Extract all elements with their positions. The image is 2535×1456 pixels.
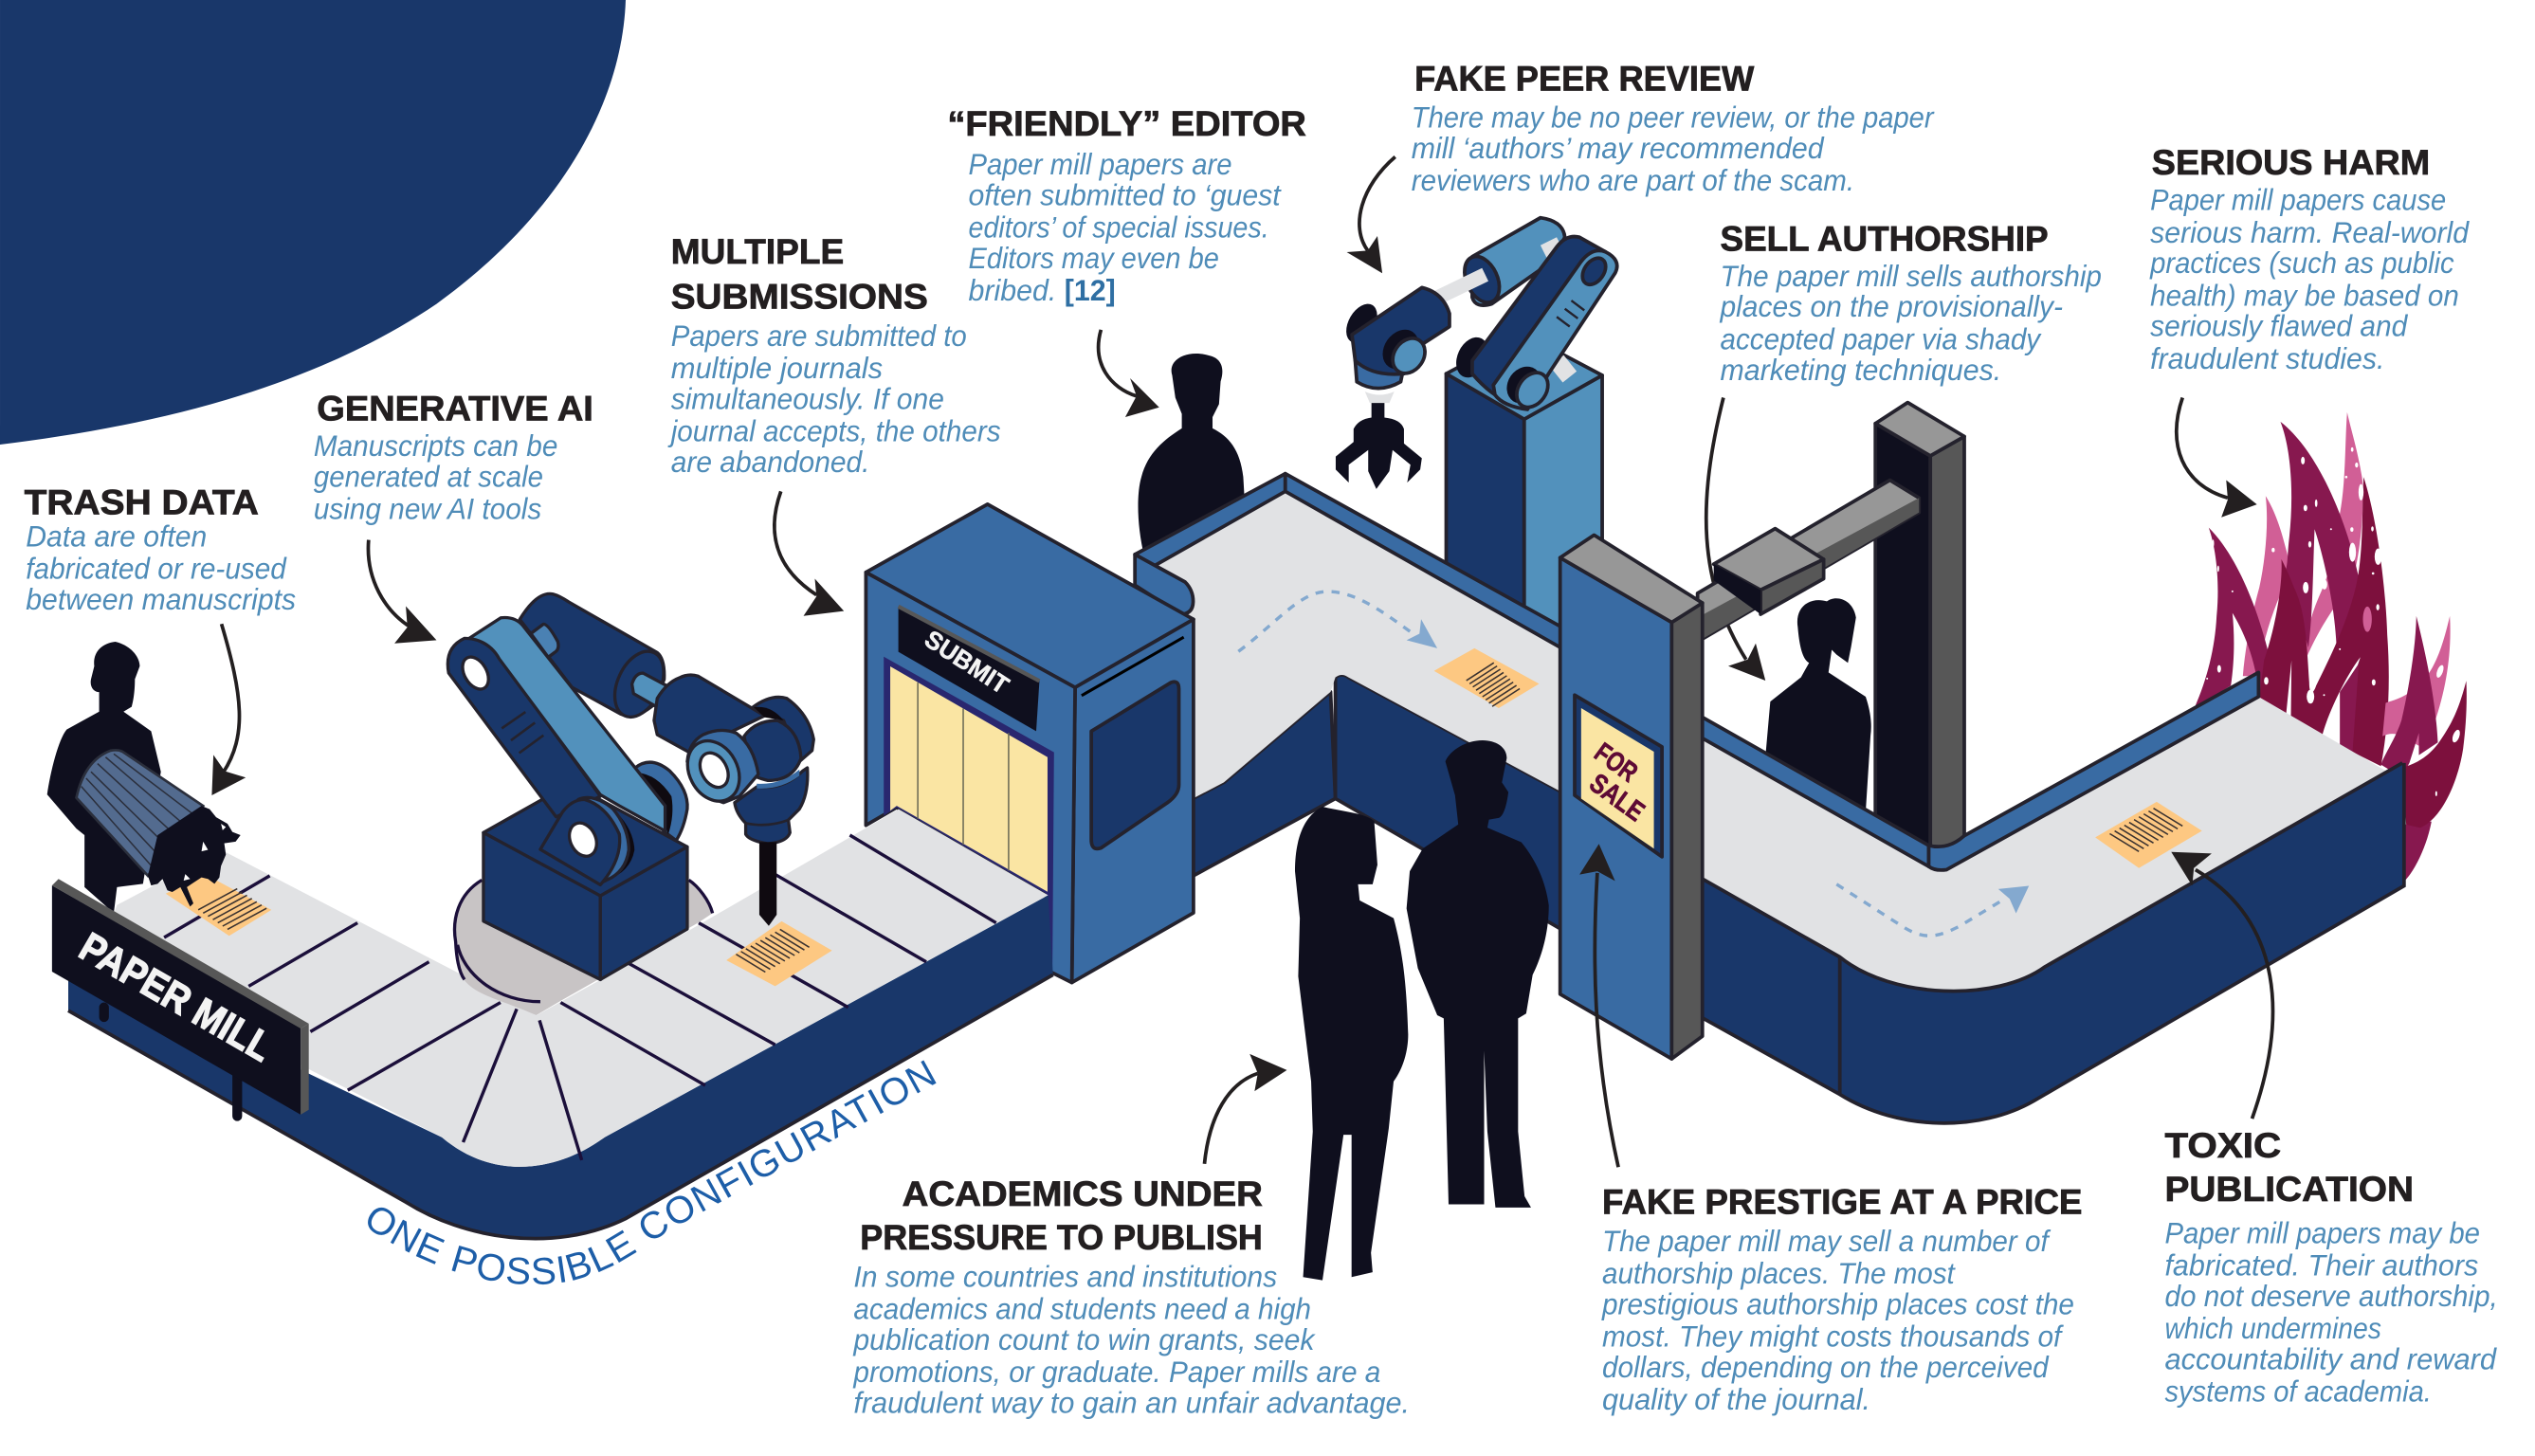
base box bbox=[483, 784, 687, 896]
for sale placard bbox=[1575, 695, 1662, 857]
illustration: fake peer review robot arm on column bbox=[1336, 218, 1617, 650]
machine: gantry beam bbox=[1698, 480, 1919, 642]
text block: serious harm: practices (such as public bbox=[2149, 246, 2454, 280]
text block: trash data bbox=[25, 482, 296, 616]
text block: fake peer review: There may be no peer review, or the paper bbox=[1412, 101, 1935, 135]
text block: fake prestige at a price: quality of the journal. bbox=[1602, 1383, 1870, 1416]
back walls bbox=[1135, 474, 1286, 566]
text block: generative AI: GENERATIVE AI bbox=[317, 389, 593, 428]
text block: academics under pressure: academics and students need a high bbox=[853, 1293, 1311, 1326]
text block: sell authorship: places on the provisionally- bbox=[1720, 290, 2063, 323]
wrist body bbox=[654, 675, 765, 752]
text block: academics under pressure: PRESSURE TO PUBLISH bbox=[860, 1218, 1263, 1257]
dashed direction arrow bbox=[1238, 592, 1413, 651]
text block: sell authorship: marketing techniques. bbox=[1720, 354, 2001, 387]
machine: for sale pillar bbox=[1560, 535, 1703, 1059]
text block: generative AI: generated at scale bbox=[314, 460, 543, 493]
silhouette bbox=[47, 642, 161, 913]
text block: multiple submissions: Papers are submitted to bbox=[671, 319, 967, 353]
sign board bbox=[52, 885, 301, 1115]
text block: sell authorship: accepted paper via shady bbox=[1720, 322, 2043, 355]
text block: generative AI bbox=[314, 389, 593, 525]
text block: toxic publication: Paper mill papers may be bbox=[2164, 1216, 2480, 1249]
text block: trash data: Data are often bbox=[26, 519, 207, 553]
text block: toxic publication: which undermines bbox=[2164, 1312, 2381, 1345]
window bbox=[1091, 682, 1179, 848]
text block: academics under pressure: fraudulent way to gain an unfair advantage. bbox=[853, 1386, 1410, 1419]
posts bbox=[104, 1008, 237, 1117]
dashed direction arrow bbox=[1836, 884, 2005, 936]
text block: trash data: between manuscripts bbox=[26, 583, 296, 616]
wrist bbox=[1340, 299, 1383, 348]
text block: friendly editor bbox=[947, 104, 1306, 307]
top face bbox=[866, 504, 1194, 687]
text block: trash data: TRASH DATA bbox=[25, 482, 259, 521]
arrow: trash data bbox=[211, 624, 246, 795]
belt slats bbox=[164, 835, 996, 1160]
text block: serious harm: fraudulent studies. bbox=[2150, 342, 2384, 375]
placard label: SALE bbox=[1584, 768, 1650, 828]
text block: academics under pressure: promotions, or graduate. Paper mills are a bbox=[852, 1356, 1380, 1389]
text block: serious harm: seriously flawed and bbox=[2150, 310, 2409, 343]
text block: friendly editor: often submitted to ‘guest bbox=[969, 179, 1282, 212]
figure: man academic silhouette bbox=[1407, 740, 1549, 1208]
sign label: PAPER MILL bbox=[72, 924, 281, 1071]
text block: sell authorship bbox=[1720, 219, 2102, 387]
front face bbox=[866, 573, 1075, 983]
submit sign bbox=[899, 607, 1039, 731]
text block: serious harm: Paper mill papers cause bbox=[2150, 184, 2446, 217]
turntable disc bbox=[455, 880, 713, 1015]
text block: sell authorship: The paper mill sells authorship bbox=[1720, 260, 2102, 293]
text block: academics under pressure: In some countries and institutions bbox=[853, 1260, 1277, 1293]
arrow: multiple submissions bbox=[775, 491, 844, 616]
text block: multiple submissions: SUBMISSIONS bbox=[671, 278, 928, 317]
text block: toxic publication: fabricated. Their authors bbox=[2164, 1249, 2478, 1283]
paper bbox=[2095, 802, 2202, 868]
text block: multiple submissions: journal accepts, the others bbox=[667, 415, 1001, 448]
belt surface bbox=[1155, 491, 1561, 802]
trash spilling out bbox=[148, 806, 241, 906]
column bbox=[1447, 373, 1524, 614]
text block: toxic publication: do not deserve authorship, bbox=[2164, 1280, 2498, 1313]
gripper claw bbox=[1336, 403, 1422, 489]
arrow: sell authorship bbox=[1706, 398, 1765, 681]
text block: fake prestige at a price: most. They might costs thousands of bbox=[1602, 1320, 2065, 1354]
text block: fake prestige at a price: FAKE PRESTIGE AT A PRICE bbox=[1602, 1183, 2082, 1222]
text block: toxic publication: accountability and reward bbox=[2164, 1342, 2498, 1375]
rear link bbox=[520, 593, 665, 716]
machine: submit booth bbox=[866, 504, 1194, 983]
arrow: generative AI bbox=[368, 540, 436, 644]
text block: friendly editor: Paper mill papers are bbox=[969, 148, 1231, 181]
figure: woman academic silhouette bbox=[1295, 807, 1408, 1281]
text block: generative AI: using new AI tools bbox=[314, 492, 541, 525]
text block: fake prestige at a price: prestigious authorship places cost the bbox=[1601, 1287, 2074, 1320]
illustration: toxic flames bbox=[2195, 412, 2467, 882]
right face bbox=[1072, 619, 1194, 983]
navy sides bbox=[1187, 692, 1336, 880]
text block: fake peer review: mill ‘authors’ may recommended bbox=[1412, 132, 1825, 165]
arrow: toxic publication bbox=[2171, 852, 2272, 1119]
arm link bbox=[447, 638, 600, 817]
door frame bbox=[884, 657, 1054, 973]
text block: multiple submissions bbox=[667, 232, 1001, 479]
arm link bbox=[1450, 332, 1494, 383]
illustration: generative AI robot arm bbox=[447, 593, 813, 1015]
arrow: fake peer review bbox=[1347, 156, 1395, 273]
machine: rear column bbox=[1875, 403, 1964, 857]
round joint bbox=[744, 720, 801, 780]
front pivot bbox=[607, 809, 634, 880]
text block: friendly editor: editors’ of special issues. bbox=[969, 211, 1269, 245]
text block: serious harm: health) may be based on bbox=[2150, 279, 2459, 312]
text block: fake peer review bbox=[1412, 59, 1935, 197]
decorative navy corner shape bbox=[0, 0, 626, 445]
upper cylinder bbox=[1472, 218, 1565, 305]
conveyor section: upper belt with walls bbox=[1135, 474, 1561, 930]
rolled wall end bbox=[1135, 555, 1194, 614]
text block: multiple submissions: simultaneously. If one bbox=[671, 382, 944, 415]
back cap bbox=[752, 697, 813, 761]
walls bbox=[1698, 715, 1928, 866]
sign label: SUBMIT bbox=[920, 625, 1014, 700]
arrow: fake prestige bbox=[1579, 844, 1618, 1167]
text block: multiple submissions: MULTIPLE bbox=[671, 232, 844, 271]
text block: sell authorship: SELL AUTHORSHIP bbox=[1720, 219, 2049, 258]
text block: toxic publication bbox=[2164, 1126, 2498, 1409]
text block: friendly editor: bribed. [12] bbox=[969, 274, 1116, 307]
text block: serious harm: SERIOUS HARM bbox=[2152, 143, 2430, 182]
text block: toxic publication: systems of academia. bbox=[2164, 1375, 2432, 1409]
text block: academics under pressure: ACADEMICS UNDER bbox=[903, 1174, 1263, 1213]
text block: toxic publication: PUBLICATION bbox=[2164, 1170, 2414, 1209]
conveyor section: final belt bbox=[1698, 672, 2404, 1123]
text block: fake prestige at a price bbox=[1601, 1183, 2082, 1416]
arrow: academics bbox=[1204, 1054, 1286, 1164]
figure: friendly editor silhouette bbox=[1138, 354, 1247, 557]
text block: fake peer review: reviewers who are part of the scam. bbox=[1412, 164, 1854, 197]
text block: academics under pressure: publication count to win grants, seek bbox=[852, 1323, 1316, 1356]
text block: academics under pressure bbox=[852, 1174, 1410, 1419]
text block: trash data: fabricated or re-used bbox=[26, 553, 288, 586]
arrow: serious harm bbox=[2177, 398, 2257, 518]
trash can bbox=[77, 750, 203, 876]
text block: friendly editor: “FRIENDLY” EDITOR bbox=[947, 104, 1306, 143]
text block: toxic publication: TOXIC bbox=[2164, 1126, 2281, 1165]
sign: paper mill bbox=[52, 879, 309, 1117]
rear pivot plate bbox=[635, 762, 687, 841]
conveyor section: lower belt with turn bbox=[68, 810, 1053, 1239]
navy side bbox=[68, 895, 1053, 1239]
text block: multiple submissions: are abandoned. bbox=[671, 446, 869, 479]
paper at start of line bbox=[166, 874, 271, 936]
drill spike bbox=[759, 842, 776, 926]
paper bbox=[726, 921, 832, 986]
figure: person holding trash can bbox=[47, 642, 241, 913]
text block: fake prestige at a price: The paper mill may sell a number of bbox=[1602, 1225, 2052, 1258]
figure: authorship buyer silhouette bbox=[1765, 598, 1871, 811]
caption: one possible configuration: ONE POSSIBLE CONFIGURATION bbox=[368, 1060, 937, 1285]
placard label bbox=[1584, 737, 1650, 828]
text block: fake prestige at a price: dollars, depending on the perceived bbox=[1602, 1351, 2050, 1384]
text block: fake prestige at a price: authorship places. The most bbox=[1602, 1257, 1956, 1290]
paper bbox=[1434, 648, 1539, 708]
navy side bbox=[1698, 763, 2404, 1123]
collar bbox=[735, 768, 808, 844]
wrist ring bbox=[687, 730, 758, 803]
belt surface bbox=[1698, 697, 2386, 992]
text block: fake peer review: FAKE PEER REVIEW bbox=[1414, 59, 1755, 98]
arrow: friendly editor bbox=[1099, 330, 1159, 417]
belt surface bbox=[98, 810, 1049, 1167]
text block: generative AI: Manuscripts can be bbox=[314, 429, 557, 463]
text block: friendly editor: Editors may even be bbox=[969, 242, 1219, 275]
placard label: FOR bbox=[1589, 737, 1643, 789]
door panels bbox=[890, 666, 1048, 892]
text block: serious harm bbox=[2149, 143, 2471, 375]
text block: serious harm: serious harm. Real-world bbox=[2150, 216, 2471, 249]
text block: multiple submissions: multiple journals bbox=[671, 352, 883, 385]
